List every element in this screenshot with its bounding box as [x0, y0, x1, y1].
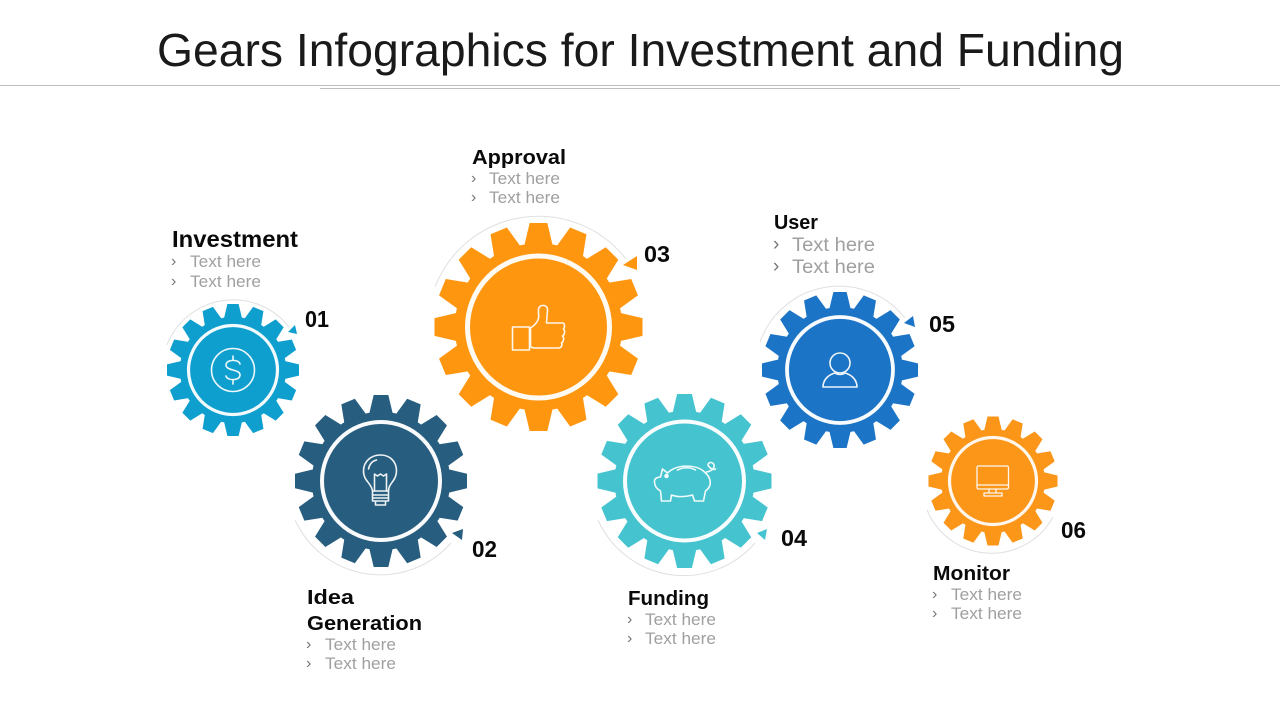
gear 06: monitor: [927, 416, 1058, 553]
text block: user: User: [774, 211, 818, 234]
text block: user: Text here: [792, 234, 875, 256]
text block: user: Text here: [792, 256, 875, 278]
text block: monitor: Monitor: [933, 562, 1010, 585]
number 04: 04: [781, 525, 807, 551]
text block: idea generation: [306, 586, 422, 673]
text block: monitor: ›: [932, 605, 937, 622]
text block: investment: ›: [171, 253, 176, 270]
icon: user: [823, 353, 857, 387]
icon: computer monitor: [977, 466, 1008, 496]
text block: investment: ›: [171, 273, 176, 290]
icon: dollar coin: [212, 348, 254, 392]
icon: piggy bank: [654, 463, 716, 501]
text block: funding: [627, 587, 716, 648]
text block: approval: [471, 146, 566, 207]
text block: approval: Approval: [472, 146, 566, 169]
text block: user: ›: [773, 256, 779, 277]
gear 05: user: [760, 286, 918, 448]
text block: investment: Text here: [190, 253, 261, 271]
text block: user: [773, 211, 875, 278]
text block: monitor: [932, 562, 1022, 623]
text block: monitor: ›: [932, 586, 937, 603]
gear 04: funding: [598, 394, 772, 576]
text block: idea generation: Text here: [325, 636, 396, 654]
gear 02: idea generation: [295, 395, 467, 575]
number 05: 05: [929, 311, 955, 337]
text block: idea generation: Text here: [325, 655, 396, 673]
icon: light bulb: [364, 455, 396, 505]
gear 03: approval: [434, 216, 642, 431]
text block: monitor: Text here: [951, 586, 1022, 604]
text block: idea generation: Idea: [307, 586, 355, 609]
text block: approval: ›: [471, 189, 476, 206]
text block: funding: Text here: [645, 611, 716, 629]
text block: investment: Investment: [172, 226, 298, 252]
text block: funding: ›: [627, 630, 632, 647]
text block: idea generation: ›: [306, 655, 311, 672]
text block: funding: ›: [627, 611, 632, 628]
number 03: 03: [644, 241, 670, 267]
text block: idea generation: Generation: [307, 612, 422, 635]
text block: approval: ›: [471, 170, 476, 187]
title: Gears Infographics for Investment and Funding: [157, 24, 1124, 76]
text block: investment: Text here: [190, 273, 261, 291]
text block: monitor: Text here: [951, 605, 1022, 623]
text block: funding: Funding: [628, 587, 709, 610]
text block: approval: Text here: [489, 170, 560, 188]
text block: investment: [171, 226, 298, 291]
text block: approval: Text here: [489, 189, 560, 207]
number 01: 01: [305, 306, 329, 332]
number 06: 06: [1061, 517, 1086, 543]
number 02: 02: [472, 536, 497, 562]
icon: thumbs up: [512, 305, 565, 350]
text block: idea generation: ›: [306, 636, 311, 653]
gear 01: investment: [167, 300, 299, 436]
text block: funding: Text here: [645, 630, 716, 648]
text block: user: ›: [773, 234, 779, 255]
